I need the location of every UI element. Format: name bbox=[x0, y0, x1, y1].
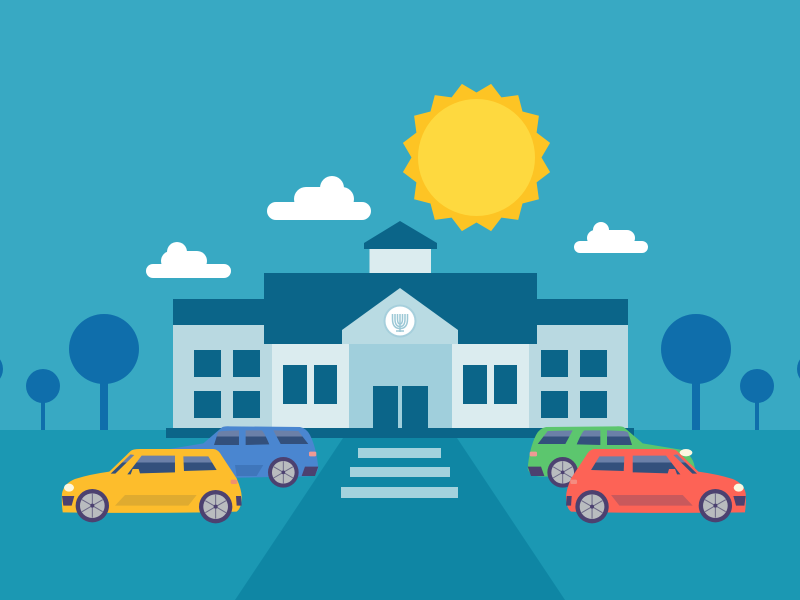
foundation bbox=[166, 428, 634, 438]
gable bbox=[342, 288, 458, 344]
trees: left bbox=[0, 314, 139, 432]
cloud: upper centre bbox=[267, 176, 371, 220]
main roof bbox=[264, 273, 537, 344]
inner walls bbox=[272, 344, 529, 428]
car: yellow bbox=[62, 449, 242, 523]
trees: right bbox=[661, 314, 800, 432]
building bbox=[166, 221, 634, 438]
road steps bbox=[341, 448, 458, 498]
cupola bbox=[364, 221, 437, 273]
car: green bbox=[528, 426, 695, 488]
wing walls bbox=[173, 325, 628, 428]
road bbox=[235, 438, 565, 600]
wing windows bbox=[194, 350, 607, 418]
wing roofs bbox=[173, 299, 628, 325]
ground bbox=[0, 430, 800, 600]
car: red bbox=[566, 449, 746, 523]
sky background bbox=[0, 0, 800, 432]
cloud: right bbox=[574, 222, 648, 253]
central entrance wall bbox=[349, 344, 452, 429]
emblem: menorah bbox=[384, 304, 416, 338]
sun bbox=[403, 84, 550, 231]
car: blue bbox=[151, 426, 318, 488]
doors bbox=[373, 386, 428, 429]
inner windows bbox=[283, 365, 517, 404]
cloud: left bbox=[146, 242, 231, 278]
